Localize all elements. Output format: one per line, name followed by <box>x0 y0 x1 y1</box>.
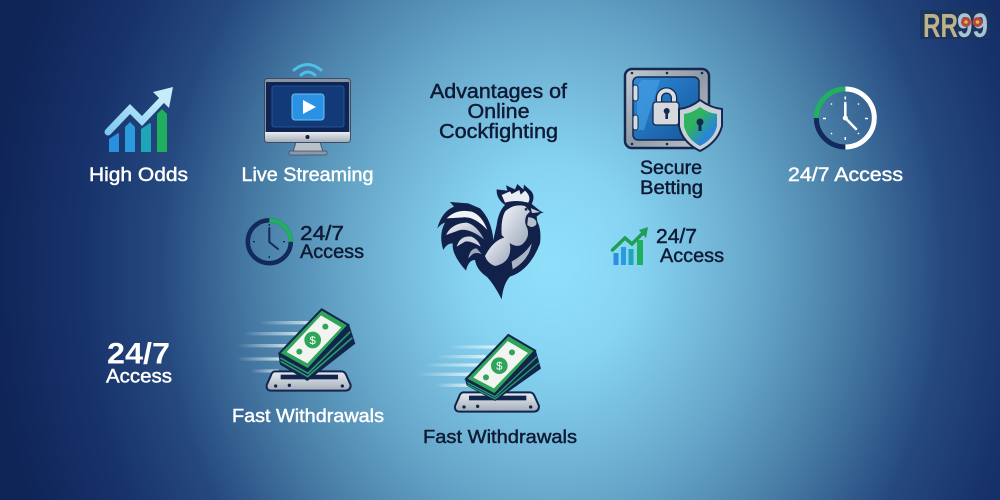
item: High Odds <box>89 87 188 186</box>
label: Live Streaming: Live Streaming <box>242 165 374 186</box>
title: Online <box>468 101 530 123</box>
icon: white and green clock <box>816 89 874 147</box>
logo: RR99 <box>920 7 990 45</box>
label: High Odds: High Odds <box>89 165 188 186</box>
icon: money stack on tray <box>237 309 354 391</box>
icon: small green growth chart <box>612 227 648 265</box>
label: 24/7 Access: 24/7 Access <box>788 165 903 186</box>
logo: RR99: 99 <box>957 7 988 45</box>
item: 24/7 Access top right <box>788 89 903 186</box>
title <box>430 81 567 143</box>
title: Cockfighting <box>439 121 558 143</box>
icon: safe with padlock and shield <box>625 69 722 151</box>
label: 24/7 Access: 24/7 <box>656 226 697 248</box>
item: 24/7 Access middle left <box>248 220 364 263</box>
item: 24/7 Access middle left: Access <box>300 242 364 263</box>
item: Live Streaming <box>242 64 374 186</box>
icon: rising bar chart <box>108 87 173 152</box>
logo: RR99: RR <box>923 7 958 44</box>
title: Advantages of <box>430 81 567 103</box>
label: Fast Withdrawals: Fast Withdrawals <box>232 406 384 426</box>
item: Fast Withdrawals dark <box>417 335 577 447</box>
text: 24/7 Access left: Access <box>106 366 172 388</box>
text: 24/7 Access left <box>106 338 172 388</box>
icon: rooster <box>437 184 542 299</box>
text: 24/7 Access left: 24/7 <box>107 338 170 370</box>
item: Fast Withdrawals white <box>232 309 384 426</box>
icon: money stack on tray: $ <box>310 335 317 347</box>
icon: monitor with play button <box>264 64 350 155</box>
icon: money stack on tray <box>417 335 540 412</box>
item: 24/7 Access middle right: Access <box>660 246 724 267</box>
item: Secure Betting <box>625 69 722 199</box>
icon: money stack on tray: $ <box>496 361 503 373</box>
item: Secure Betting: Betting <box>640 178 703 199</box>
label: Fast Withdrawals: Fast Withdrawals <box>423 427 577 447</box>
label: Secure Betting: Secure <box>640 158 702 179</box>
item: 24/7 Access middle right <box>612 226 724 267</box>
icon: navy clock <box>248 220 291 263</box>
label: 24/7 Access: 24/7 <box>300 223 344 245</box>
